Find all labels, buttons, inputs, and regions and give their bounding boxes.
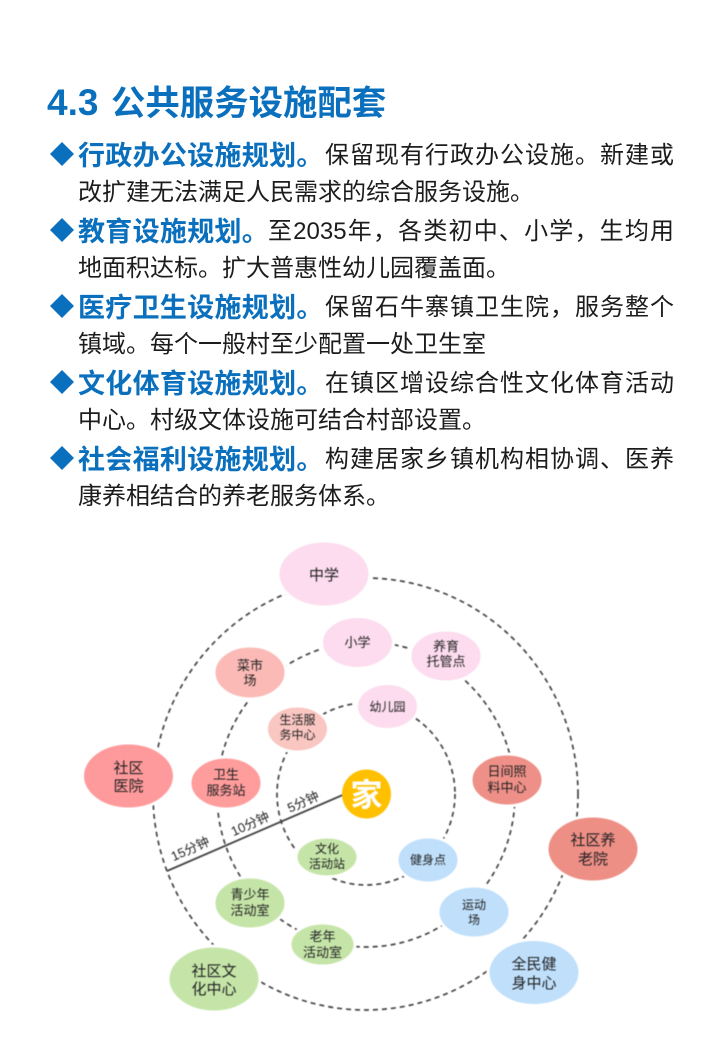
icon: diamond bullet	[50, 446, 74, 470]
node: community hospital: 医院	[113, 777, 144, 795]
walking-time radius line	[167, 794, 345, 871]
icon: diamond bullet	[50, 370, 74, 394]
node: culture activity station: 文化	[315, 841, 339, 856]
node: youth activity room	[214, 877, 286, 929]
node: food market: 菜市	[237, 658, 263, 673]
text block: education facilities: 教育设施规划。	[78, 217, 269, 247]
node: kindergarten	[356, 684, 418, 730]
node: community culture center: 社区文	[191, 963, 237, 980]
node: national fitness center: 全民健	[511, 955, 557, 973]
node: sports ground: 运动	[462, 898, 486, 912]
node: culture activity station: 活动站	[309, 857, 345, 871]
text block: culture and sports facilities: 在镇区增设综合性文化体育活动	[325, 370, 674, 397]
text block: medical facilities: 医疗卫生设施规划。	[78, 293, 324, 323]
node: national fitness center	[488, 940, 580, 1006]
node: fitness point: 健身点	[410, 852, 446, 867]
text block: education facilities: 地面积达标。扩大普惠性幼儿园覆盖面。	[78, 255, 510, 282]
title: 4.3	[47, 82, 98, 123]
text block: administrative facilities	[50, 141, 674, 206]
node: home: 家	[350, 777, 383, 813]
node: community hospital	[82, 743, 174, 809]
node: middle school: 中学	[309, 567, 339, 584]
text block: medical facilities: 镇域。每个一般村至少配置一处卫生室	[78, 331, 486, 358]
node: life service center: 务中心	[279, 727, 316, 742]
label: 15 minutes: 15分钟	[169, 834, 212, 864]
node: day care center: 日间照	[487, 764, 527, 779]
node: day care center	[471, 754, 543, 806]
node: community elderly home: 社区养	[570, 832, 616, 849]
node: food market	[214, 646, 286, 699]
node: childcare point: 养育	[433, 639, 459, 654]
label: 10 minutes: 10分钟	[229, 809, 272, 839]
node: health service station	[190, 757, 262, 809]
node: day care center: 料中心	[487, 780, 527, 795]
label: 5 minutes: 5分钟	[285, 788, 321, 815]
text block: culture and sports facilities: 文化体育设施规划。	[78, 369, 324, 399]
node: middle school	[278, 541, 370, 607]
node: childcare point: 托管点	[426, 654, 466, 669]
node: community elderly home: 老院	[578, 850, 608, 868]
node: health service station: 服务站	[206, 783, 246, 798]
node: sports ground	[438, 886, 510, 938]
node: national fitness center: 身中心	[511, 975, 557, 992]
node: youth activity room: 活动室	[230, 903, 270, 918]
node: senior activity room	[290, 923, 355, 966]
text block: social welfare facilities	[50, 445, 674, 510]
text block: culture and sports facilities	[50, 369, 674, 434]
node: senior activity room: 老年	[309, 929, 336, 944]
icon: diamond bullet	[50, 142, 74, 166]
node: youth activity room: 青少年	[230, 887, 270, 902]
text block: medical facilities: 保留石牛寨镇卫生院，服务整个	[325, 294, 674, 321]
text block: administrative facilities: 行政办公设施规划。	[78, 141, 324, 171]
node: senior activity room: 活动室	[303, 945, 342, 960]
text block: education facilities: 至2035年，各类初中、小学，生均用	[268, 218, 674, 245]
text block: education facilities	[50, 217, 674, 282]
node: community culture center	[168, 946, 260, 1012]
text block: medical facilities	[50, 293, 674, 358]
text block: administrative facilities: 保留现有行政办公设施。新建或	[325, 142, 674, 169]
node: primary school	[322, 616, 394, 668]
node: community culture center: 化中心	[191, 981, 237, 998]
node: community elderly home	[547, 816, 639, 882]
node: community hospital: 社区	[113, 760, 144, 777]
icon: diamond bullet	[50, 294, 74, 318]
node: life service center: 生活服	[279, 713, 316, 727]
node: home	[342, 770, 391, 818]
node: primary school: 小学	[344, 635, 371, 650]
text block: social welfare facilities: 构建居家乡镇机构相协调、医养	[325, 446, 674, 473]
title: 公共服务设施配套	[111, 85, 386, 123]
node: food market: 场	[243, 673, 257, 688]
text block: administrative facilities: 改扩建无法满足人民需求的综合服务设施。	[78, 179, 534, 206]
icon: diamond bullet	[50, 218, 74, 242]
node: life service center	[266, 706, 328, 752]
node: culture activity station	[296, 837, 358, 877]
node: sports ground: 场	[468, 913, 480, 927]
text block: social welfare facilities: 康养相结合的养老服务体系。	[78, 483, 390, 510]
node: fitness point	[397, 837, 459, 883]
text block: culture and sports facilities: 中心。村级文体设施可结合村部设置。	[78, 407, 486, 434]
node: health service station: 卫生	[213, 767, 239, 782]
node: kindergarten: 幼儿园	[369, 700, 406, 714]
node: childcare point	[410, 630, 482, 682]
text block: social welfare facilities: 社会福利设施规划。	[78, 445, 324, 475]
